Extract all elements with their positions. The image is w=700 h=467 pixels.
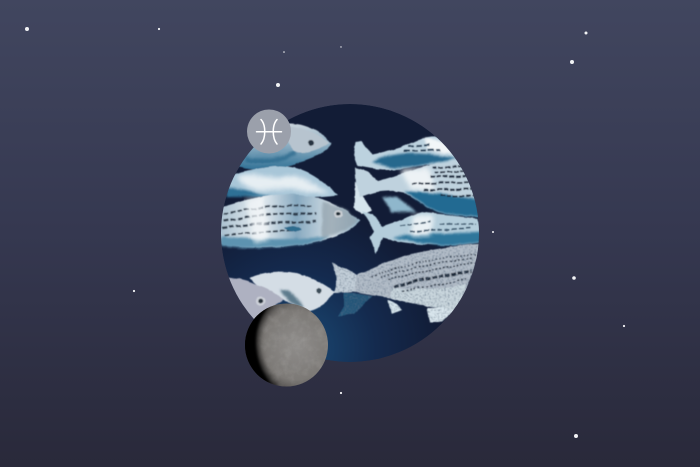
icon: Pisces badge bbox=[247, 110, 291, 154]
fish: right second bbox=[355, 162, 482, 216]
fish: bottom left bbox=[227, 277, 284, 320]
fish circle bbox=[219, 104, 482, 362]
stars bbox=[25, 27, 625, 438]
school of fish bbox=[219, 123, 482, 322]
fish: lower left bbox=[250, 272, 335, 311]
fish: middle left bbox=[219, 194, 360, 248]
fish: right third bbox=[362, 211, 482, 254]
fish: large lower right bbox=[332, 244, 480, 322]
fish: top left bbox=[236, 123, 332, 170]
fish: second left bbox=[226, 166, 338, 197]
fish: right top bbox=[354, 137, 462, 170]
fish: small behind bbox=[354, 181, 416, 214]
moon bbox=[245, 304, 328, 386]
